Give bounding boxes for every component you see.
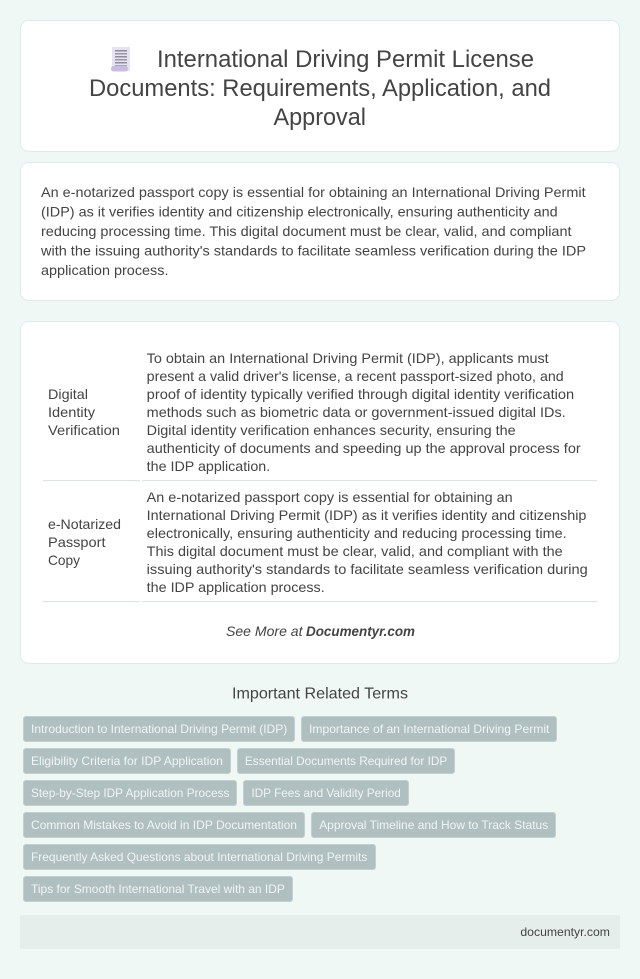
row text: e-Notarized Passport Copy: An e-notarized passport copy is essential for obtaining an bbox=[147, 489, 513, 505]
tag: Approval Timeline bbox=[312, 812, 556, 838]
tag: Essential Documents bbox=[238, 748, 454, 774]
tag: Common Mistakes bbox=[24, 812, 304, 838]
tag: Essential Documents: Essential Documents Required for IDP bbox=[245, 754, 447, 768]
tag: Eligibility bbox=[24, 748, 230, 774]
tag: Eligibility: Eligibility Criteria for IDP Application bbox=[31, 754, 223, 768]
row label: Digital Identity Verification: Identity bbox=[48, 404, 95, 420]
row text: Digital Identity Verification: present a valid driver's license, a recent passport-sized photo, and bbox=[147, 368, 564, 384]
row text: Digital Identity Verification: authenticity of documents and speeding up the approval process for bbox=[147, 440, 581, 456]
row text: Digital Identity Verification: proof of identity typically verified through digital identity verification bbox=[147, 386, 574, 402]
row label: e-Notarized Passport Copy: e-Notarized bbox=[48, 516, 121, 532]
heading: Important Related Terms: Important Related Terms bbox=[232, 686, 408, 702]
row label: e-Notarized Passport Copy: Copy bbox=[48, 552, 80, 568]
tag: Step-by-Step: Step-by-Step IDP Application Process bbox=[31, 786, 229, 800]
row text: Digital Identity Verification: To obtain an International Driving Permit (IDP), applicants must bbox=[147, 350, 549, 366]
row text: e-Notarized Passport Copy: the IDP application process. bbox=[147, 579, 325, 595]
see more link bbox=[226, 623, 415, 639]
title: Approval bbox=[274, 104, 366, 131]
row label: Digital Identity Verification: Verification bbox=[48, 422, 120, 438]
summary text bbox=[40, 184, 586, 278]
summary text: application process. bbox=[41, 262, 168, 278]
row label: Digital Identity Verification bbox=[48, 386, 120, 438]
row text: e-Notarized Passport Copy: issuing authority's standards to facilitate seamless verification during bbox=[147, 561, 588, 577]
title bbox=[89, 46, 551, 131]
panel: details table bbox=[20, 322, 620, 664]
tag: Fees bbox=[244, 780, 408, 806]
tag: Step-by-Step bbox=[24, 780, 236, 806]
panel: summary paragraph bbox=[20, 162, 620, 300]
see more link: See More at bbox=[226, 623, 304, 639]
row text: e-Notarized Passport Copy bbox=[147, 489, 588, 595]
row label: e-Notarized Passport Copy: Passport bbox=[48, 534, 106, 550]
row text: Digital Identity Verification: methods such as biometric data or government-issued digital IDs. bbox=[147, 404, 566, 420]
tag: FAQ: Frequently Asked Questions about International Driving Permits bbox=[31, 850, 367, 864]
title: Documents: Requirements, Application, and bbox=[89, 75, 551, 102]
tag: Fees: IDP Fees and Validity Period bbox=[251, 786, 401, 800]
row label: e-Notarized Passport Copy bbox=[48, 516, 121, 568]
tag: Importance bbox=[302, 716, 556, 742]
tag: Introduction: Introduction to International Driving Permit (IDP) bbox=[31, 722, 287, 736]
see more link: Documentyr.com bbox=[306, 623, 415, 639]
summary text: An e-notarized passport copy is essential for obtaining an International Driving Permit bbox=[41, 184, 586, 200]
tag: Tips bbox=[24, 876, 292, 902]
panel: related term tags bbox=[24, 716, 556, 902]
tag: Approval Timeline: Approval Timeline and How to Track Status bbox=[319, 818, 548, 832]
summary text: with the issuing authority's standards to facilitate seamless verification during the IDP bbox=[40, 242, 586, 258]
row text: Digital Identity Verification: the IDP application. bbox=[147, 458, 270, 474]
title: International Driving Permit License bbox=[157, 46, 534, 73]
row text: e-Notarized Passport Copy: This digital document must be clear, valid, and compliant with the bbox=[147, 543, 563, 559]
tag: Tips: Tips for Smooth International Travel with an IDP bbox=[31, 882, 285, 896]
row text: e-Notarized Passport Copy: electronically, ensuring authenticity and reducing processing time. bbox=[147, 525, 567, 541]
tag: Introduction bbox=[24, 716, 294, 742]
row label: Digital Identity Verification: Digital bbox=[48, 386, 88, 402]
tag: FAQ bbox=[24, 844, 376, 870]
tag: Common Mistakes: Common Mistakes to Avoid in IDP Documentation bbox=[31, 818, 297, 832]
footer bar bbox=[20, 915, 620, 949]
footer bar: documentyr.com bbox=[520, 925, 610, 939]
panel: title header bbox=[20, 20, 620, 152]
icon: document scroll bbox=[111, 47, 130, 72]
row text: e-Notarized Passport Copy: International Driving Permit (IDP) as it verifies identity and citizenship bbox=[147, 507, 587, 523]
summary text: reducing processing time. This digital document must be clear, valid, and compliant bbox=[41, 223, 572, 239]
row text: Digital Identity Verification bbox=[147, 350, 581, 474]
row text: Digital Identity Verification: Digital identity verification enhances security, ensuring the bbox=[147, 422, 516, 438]
tag: Importance: Importance of an International Driving Permit bbox=[309, 722, 550, 736]
summary text: (IDP) as it verifies identity and citizenship electronically, ensuring authenticity and bbox=[41, 204, 558, 220]
